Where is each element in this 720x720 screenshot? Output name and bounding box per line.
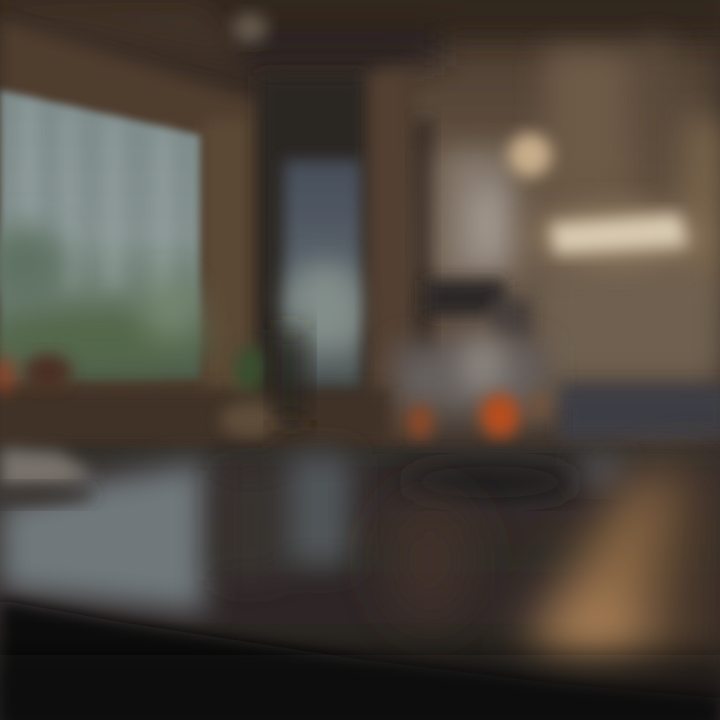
grey reflection right of centre [576, 454, 624, 486]
pendant lamp bar [533, 206, 703, 266]
ceiling spotlight [232, 13, 268, 43]
left window [0, 90, 210, 382]
dark appliance silhouette [425, 280, 530, 340]
counter top [0, 448, 720, 720]
left wall frame around window [0, 20, 262, 420]
dark reflection on counter [400, 466, 580, 498]
garden greenery [0, 225, 210, 368]
foreground fill [0, 655, 720, 720]
centre counter reflections [220, 455, 350, 580]
red and brown objects on sill [0, 354, 72, 393]
centre window [284, 160, 362, 395]
dark figure silhouette [275, 330, 305, 420]
dark pillar edge [412, 120, 434, 380]
dark centre column [258, 75, 368, 435]
green plant and pot [220, 346, 280, 438]
pendant lamp glow [508, 133, 552, 177]
ceiling [0, 0, 720, 70]
right backsplash low band [560, 385, 720, 440]
dark foreground edge [0, 600, 720, 720]
warm wood reflection right [385, 460, 720, 690]
window sill band [0, 388, 390, 446]
centre glassware [395, 335, 545, 410]
window mullions [22, 100, 171, 300]
right wall cabinet panels [440, 40, 720, 380]
wooden pillar [368, 70, 410, 440]
left counter reflection [0, 448, 205, 612]
orange fruits centre [407, 389, 549, 440]
